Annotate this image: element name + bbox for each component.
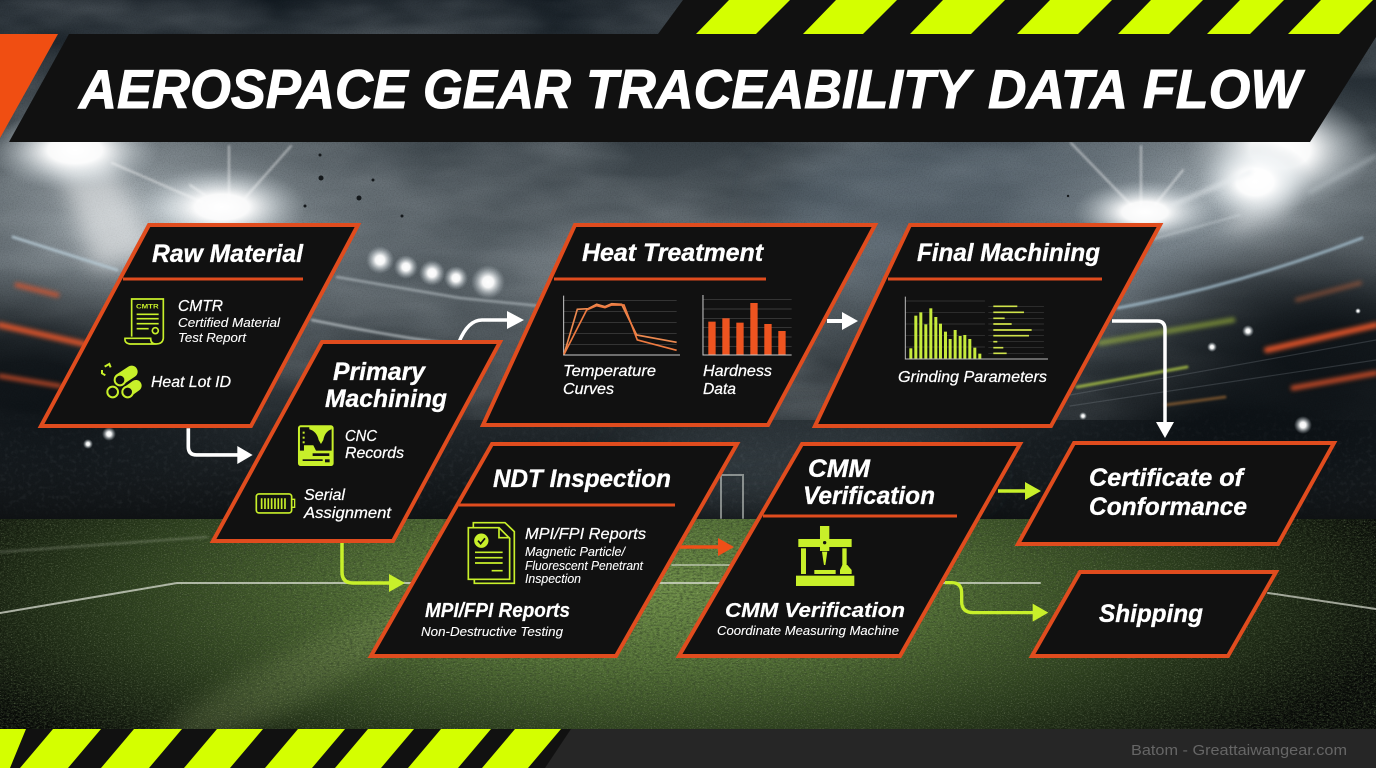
bottom hazard stripes [0,729,561,768]
watermark: Batom - Greattaiwangear.com [1131,742,1347,759]
icon: coordinate measuring machine [796,526,854,586]
label: MPI/FPI reports detail: Fluorescent Penetrant [525,559,643,573]
label: CMM verification summary [717,600,905,638]
chart: grinding horizontal bars [988,306,1044,353]
title text: AEROSPACE [77,58,410,120]
arrow: NDT to CMM [680,538,734,556]
label: MPI/FPI reports summary: MPI/FPI Reports [425,600,570,622]
footer band [0,729,1376,768]
panel: NDT inspection [371,444,737,656]
label: serial assignment: Assignment [303,505,392,522]
label: CMTR: CMTR [178,298,223,315]
icon: CMTR certificate: CMTR [136,304,159,311]
title text: TRACEABILITY [586,58,974,120]
top hazard stripes [696,0,1373,34]
panel: raw material [41,225,358,426]
label: serial assignment: Serial [304,487,345,504]
label: certified material test report [178,316,281,345]
title text: GEAR [423,58,571,120]
arrow: primary machining to heat treatment [459,311,524,342]
arrow: final machining to certificate [1112,321,1174,438]
label: MPI/FPI reports detail: Inspection [525,572,581,586]
label: CMM verification summary: CMM Verification [725,600,905,622]
title text: DATA [988,58,1128,120]
heading: primary machining: Machining [325,385,447,413]
panel: CMM verification [679,444,1020,656]
icon: inspection documents [468,523,514,583]
heading: final machining: Final Machining [917,239,1100,267]
heading: certificate of conformance: Certificate of [1089,464,1246,492]
panel: final machining [815,225,1160,426]
label: CNC records: CNC [345,428,377,445]
label: certified material test report: Test Report [178,331,247,345]
icon: serial battery tag [256,494,295,513]
label: CNC records: Records [345,445,404,462]
heading: certificate of conformance [1089,464,1247,521]
heading: CMM verification: Verification [803,482,935,510]
arrow: CMM to certificate [998,482,1041,500]
label: hardness data: Data [703,381,736,398]
title text: FLOW [1143,58,1305,120]
heading: raw material: Raw Material [152,240,304,268]
label: grinding parameters: Grinding Parameters [898,369,1047,386]
label: MPI/FPI reports detail: MPI/FPI Reports [525,526,646,543]
title text [77,58,1305,120]
label: MPI/FPI reports detail [525,526,646,586]
heading: CMM verification [803,455,935,510]
panel: heat treatment [483,225,875,425]
chart: hardness data [703,295,792,355]
panel: shipping [1032,572,1276,656]
panel: primary machining [213,342,500,541]
title black band [9,0,1376,142]
label: temperature curves: Curves [563,381,614,398]
title bar [0,0,1376,142]
label: hardness data [703,363,772,398]
panel: certificate of conformance [1018,443,1334,544]
label: certified material test report: Certified Material [178,316,281,330]
icon: CNC machine [299,426,333,465]
icon: heat lot bars [102,364,136,397]
arrow: CMM to shipping [945,583,1048,622]
icon: CMTR certificate [125,299,163,344]
label: CMM verification summary: Coordinate Measuring Machine [717,624,899,638]
label: temperature curves: Temperature [563,363,656,380]
label: MPI/FPI reports detail: Magnetic Particle/ [525,545,627,559]
chart: temperature curves [563,296,680,355]
heading: certificate of conformance: Conformance [1089,493,1247,521]
heading: shipping: Shipping [1099,600,1203,628]
heading: primary machining: Primary [333,358,426,386]
label: hardness data: Hardness [703,363,772,380]
heading: CMM verification: CMM [808,455,871,483]
heading: NDT inspection: NDT Inspection [493,465,671,493]
label: CNC records [345,428,404,462]
heading: heat treatment: Heat Treatment [582,239,765,267]
label: MPI/FPI reports summary: Non-Destructive Testing [421,625,563,639]
label: heat lot ID: Heat Lot ID [151,374,231,391]
arrow: heat treatment to final machining [827,312,858,330]
arrow: raw material to primary machining [188,428,253,464]
orange corner accent [0,34,58,138]
chart: grinding bars [905,297,1048,359]
label: MPI/FPI reports summary [421,600,570,639]
heading: primary machining [325,358,447,413]
arrow: primary machining to NDT [342,543,405,592]
label: serial assignment [303,487,392,522]
label: temperature curves [563,363,656,398]
